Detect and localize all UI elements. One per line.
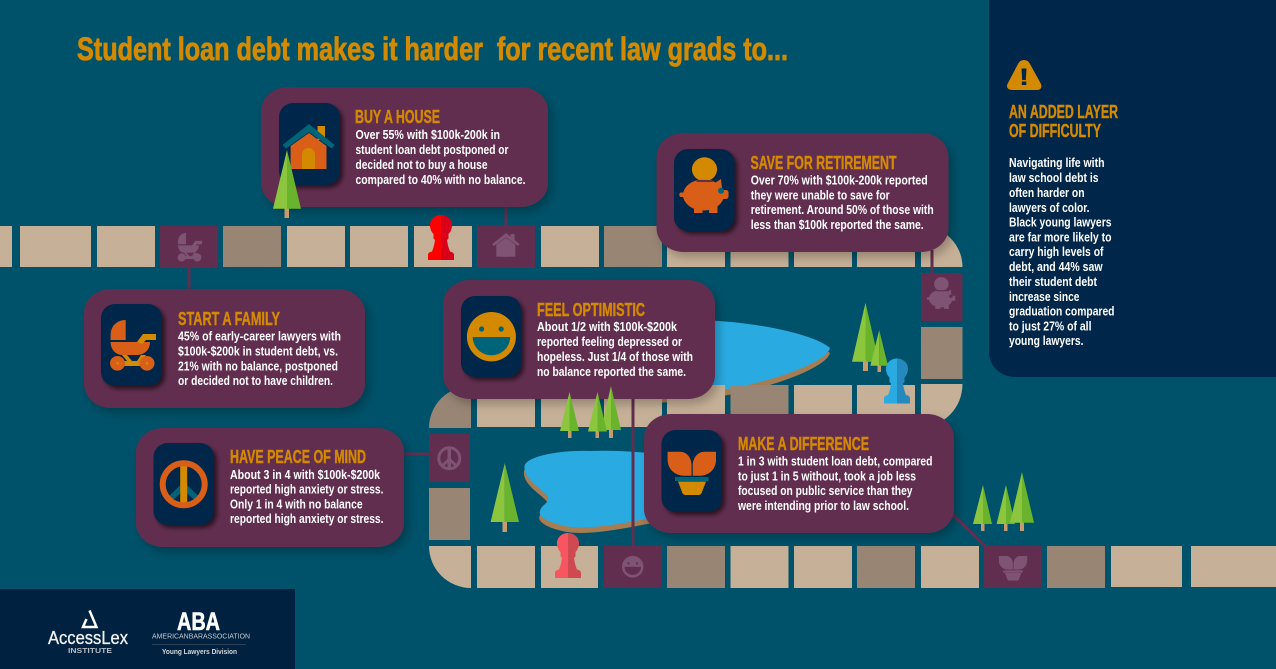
text block: have peace of mind xyxy=(230,467,384,526)
text block: difficulty detail: carry high levels of xyxy=(1009,244,1104,259)
text block: start a family: $100k-$200k in student debt, vs. xyxy=(178,344,338,358)
text block: difficulty detail: graduation compared xyxy=(1009,304,1115,318)
text block: feel optimistic: reported feeling depressed or xyxy=(537,334,682,349)
title: Student loan debt makes it harder for recent law grads to... xyxy=(77,31,788,67)
trees xyxy=(273,150,1034,532)
icon: stroller xyxy=(101,304,162,386)
logo: American Bar Association xyxy=(152,608,250,656)
text block: save for retirement xyxy=(751,172,934,232)
upper lake xyxy=(640,320,830,403)
heading: start a family: START A FAMILY xyxy=(178,309,280,329)
text block: start a family: or decided not to have children. xyxy=(178,373,333,388)
text block: difficulty detail xyxy=(1009,155,1115,348)
text block: make a difference: focused on public service than they xyxy=(738,483,913,498)
text block: buy a house: Over 55% with $100k-200k in xyxy=(356,127,500,142)
text block: difficulty detail: increase since xyxy=(1009,289,1080,304)
icon: warning triangle xyxy=(1007,60,1041,90)
text block: start a family: 21% with no balance, postponed xyxy=(178,358,338,374)
icon: plant xyxy=(662,430,722,512)
icon: small plant tile xyxy=(999,556,1027,581)
heading: feel optimistic: FEEL OPTIMISTIC xyxy=(537,300,645,320)
text block: save for retirement: retirement. Around 50% of those with xyxy=(751,202,934,217)
icon: small piggy bank tile xyxy=(927,277,955,309)
text block: feel optimistic: hopeless. Just 1/4 of those with xyxy=(537,349,693,364)
logo: American Bar Association: Young Lawyers Division xyxy=(162,647,237,656)
text block: have peace of mind: reported high anxiety or stress. xyxy=(230,511,384,526)
text block: buy a house: compared to 40% with no balance. xyxy=(356,172,526,187)
heading: have peace of mind: HAVE PEACE OF MIND xyxy=(230,447,366,467)
heading: buy a house: BUY A HOUSE xyxy=(355,107,440,127)
heading: an added layer of difficulty: AN ADDED LAYER xyxy=(1009,102,1118,122)
text block: feel optimistic: no balance reported the same. xyxy=(537,364,686,379)
heading: make a difference: MAKE A DIFFERENCE xyxy=(738,434,869,454)
icon: smiley xyxy=(461,296,521,377)
text block: difficulty detail: law school debt is xyxy=(1009,170,1098,185)
panel: start a family xyxy=(84,289,365,408)
panel: make a difference xyxy=(644,414,954,533)
text block: difficulty detail: Black young lawyers xyxy=(1009,214,1112,230)
panel: buy a house xyxy=(261,87,548,207)
text block: difficulty detail: are far more likely to xyxy=(1009,230,1112,244)
text block: buy a house: student loan debt postponed or xyxy=(356,142,508,157)
text block: start a family xyxy=(178,328,341,388)
icon: small peace sign tile xyxy=(439,448,460,469)
icon: piggy bank xyxy=(674,149,734,231)
text block: difficulty detail: young lawyers. xyxy=(1009,333,1084,348)
text block: difficulty detail: their student debt xyxy=(1009,274,1098,289)
text block: have peace of mind: Only 1 in 4 with no balance xyxy=(230,496,363,512)
icon: small stroller tile xyxy=(178,233,202,262)
text block: have peace of mind: About 3 in 4 with $100k-$200k xyxy=(230,467,381,482)
text block: difficulty detail: lawyers of color. xyxy=(1009,200,1090,215)
text block: difficulty detail: Navigating life with xyxy=(1009,155,1105,170)
text block: feel optimistic: About 1/2 with $100k-$200k xyxy=(537,319,678,334)
text block: buy a house xyxy=(356,127,526,187)
logo: AccessLex Institute: INSTITUTE xyxy=(68,646,112,655)
text block: feel optimistic xyxy=(537,319,693,379)
logo: AccessLex Institute: AccessLex xyxy=(48,628,128,648)
heading: an added layer of difficulty xyxy=(1009,102,1118,141)
text block: have peace of mind: reported high anxiety or stress. xyxy=(230,482,384,496)
panel: an added layer of difficulty xyxy=(989,0,1276,377)
panel: save for retirement xyxy=(656,133,948,252)
text block: buy a house: decided not to buy a house xyxy=(356,157,488,172)
red game pawn xyxy=(428,215,454,260)
panel: have peace of mind xyxy=(136,428,404,547)
icon: small house tile xyxy=(492,233,520,257)
text block: save for retirement: they were unable to save for xyxy=(751,188,890,202)
icon: house xyxy=(279,103,340,185)
game board path xyxy=(0,226,1276,588)
text block: save for retirement: Over 70% with $100k-200k reported xyxy=(751,172,928,188)
heading: save for retirement: SAVE FOR RETIREMENT xyxy=(750,153,896,173)
panel: logos xyxy=(0,589,295,669)
pink game pawn xyxy=(555,533,581,578)
text block: difficulty detail: often harder on xyxy=(1009,185,1085,200)
panel: feel optimistic xyxy=(443,280,715,399)
icon: small smiley tile xyxy=(622,556,643,578)
text block: make a difference xyxy=(737,454,933,513)
connectors from cards to tiles xyxy=(189,205,986,548)
blue game pawn xyxy=(884,358,910,404)
text block: make a difference: 1 in 3 with student loan debt, compared xyxy=(738,454,933,468)
text block: difficulty detail: debt, and 44% saw xyxy=(1009,259,1103,274)
lower lake xyxy=(524,451,665,533)
text block: start a family: 45% of early-career lawyers with xyxy=(178,328,341,344)
text block: make a difference: were intending prior to law school. xyxy=(737,498,909,513)
text block: save for retirement: less than $100k reported the same. xyxy=(751,217,924,232)
icon: peace sign xyxy=(154,443,214,525)
logo: American Bar Association: ABA xyxy=(177,608,220,636)
text block: difficulty detail: to just 27% of all xyxy=(1009,318,1092,334)
logo: American Bar Association: AMERICANBARASSOCIATION xyxy=(152,634,250,640)
logo: AccessLex Institute xyxy=(48,610,128,655)
text block: make a difference: to just 1 in 5 without, took a job less xyxy=(738,468,916,484)
heading: an added layer of difficulty: OF DIFFICULTY xyxy=(1009,121,1101,141)
